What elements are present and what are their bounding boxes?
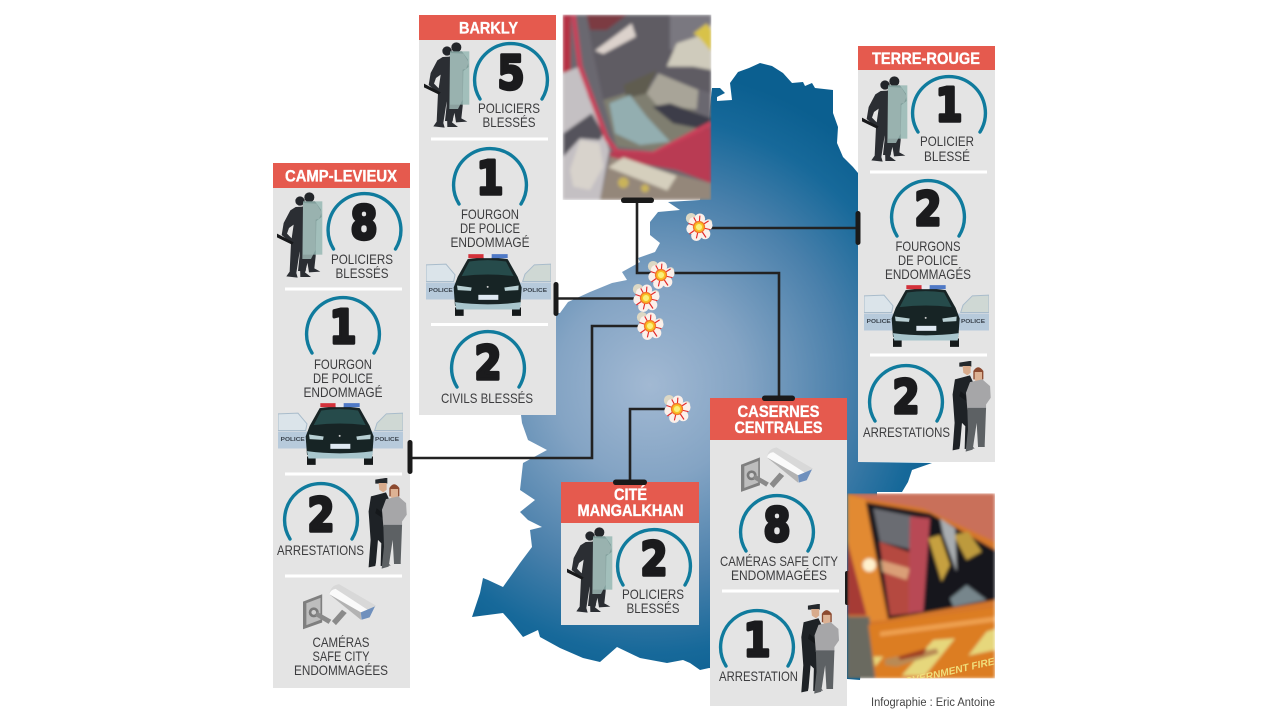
stat: 2 civils blessés: 2 — [474, 336, 502, 390]
stat: 5 policiers blessés: BLESSÉS — [482, 114, 536, 130]
panel: Cité Mangalkhan — [561, 482, 699, 625]
text: caméras safe city: ENDOMMAGÉES — [294, 662, 388, 678]
icon: security camera — [741, 447, 813, 492]
stat: 2 civils blessés: CIVILS BLESSÉS — [441, 390, 533, 406]
stat: 1 arrestation: 1 — [744, 613, 770, 667]
stat: 8 caméras — [720, 496, 839, 583]
text: caméras safe city: SAFE CITY — [312, 648, 370, 664]
heading: Terre-Rouge: TERRE-ROUGE — [872, 49, 980, 68]
icon: police car — [864, 285, 989, 347]
icon: security camera — [303, 584, 376, 629]
stat: 8 policiers blessés: BLESSÉS — [336, 265, 388, 281]
icon: arrest — [953, 361, 991, 452]
explosion marker: Camp-Levieux — [637, 312, 664, 340]
panel: Camp-Levieux — [273, 163, 410, 688]
explosion marker: Barkly — [633, 284, 660, 312]
stat: 2 fourgons: 2 — [914, 182, 942, 236]
stat: 5 policiers blessés — [475, 44, 547, 130]
panel: Barkly — [419, 15, 556, 415]
panel: Terre-Rouge — [858, 46, 995, 462]
stat: 2 arrestations: 2 — [892, 370, 920, 424]
stat: 1 fourgon: ENDOMMAGÉ — [304, 384, 382, 400]
stat: 2 fourgons: FOURGONS — [896, 238, 960, 254]
stat: 2 policiers blessés — [618, 530, 690, 616]
stat: 1 policier blessé: POLICIER — [920, 133, 974, 149]
stat: 2 fourgons — [885, 181, 971, 282]
stat: 1 fourgon — [304, 298, 382, 400]
connector: photo to Casernes Centrales — [621, 198, 795, 401]
stat: 1 fourgon: ENDOMMAGÉ — [450, 234, 530, 250]
text: caméras safe city: CAMÉRAS — [312, 634, 370, 650]
stat: 1 arrestation — [719, 611, 798, 684]
icon: riot police — [567, 527, 612, 613]
stat: 2 arrestations: ARRESTATIONS — [863, 424, 950, 440]
stat: 2 arrestations: 2 — [308, 488, 334, 542]
stat: 2 civils blessés — [441, 332, 533, 406]
stat: 1 fourgon: DE POLICE — [313, 370, 373, 386]
heading: Barkly: BARKLY — [459, 18, 519, 38]
icon: arrest — [369, 478, 407, 569]
panel: Casernes Centrales — [710, 398, 847, 706]
connector: explosion to Terre-Rouge — [705, 211, 860, 245]
connector: explosion to Cité Mangalkhan — [613, 409, 672, 485]
stat: 8 policiers blessés: POLICIERS — [331, 251, 393, 267]
photo: damaged orange fire car — [847, 493, 996, 690]
photo: damaged orange fire car: GOVERNMENT FIRE — [896, 656, 996, 690]
text: caméras safe city — [294, 634, 388, 678]
stat: 1 policier blessé — [913, 77, 985, 164]
stat: 1 fourgon: 1 — [330, 300, 356, 354]
stat: 8 caméras: 8 — [764, 498, 790, 552]
heading: Casernes Centrales: CASERNES — [738, 402, 820, 421]
icon: police car — [426, 254, 551, 316]
stat: 2 fourgons: ENDOMMAGÉS — [885, 266, 971, 282]
stat: 5 policiers blessés: 5 — [498, 46, 524, 100]
stat: 1 fourgon: FOURGON — [314, 356, 372, 372]
stat: 1 fourgon: 1 — [476, 151, 504, 205]
connector: explosion to Barkly — [554, 282, 640, 316]
photo: damaged red car interior — [563, 15, 711, 200]
heading: Casernes Centrales: CENTRALES — [734, 418, 822, 437]
explosion marker: Casernes Centrales — [648, 261, 675, 289]
stat: 1 policier blessé: BLESSÉ — [924, 148, 970, 164]
stat: 1 policier blessé: 1 — [936, 78, 962, 132]
icon: police car — [278, 403, 403, 465]
stat: 2 policiers blessés: BLESSÉS — [626, 600, 680, 616]
icon: riot police — [277, 192, 322, 278]
stat: 1 arrestation: ARRESTATION — [719, 668, 798, 684]
heading: Camp-Levieux: CAMP-LEVIEUX — [285, 166, 398, 186]
stat: 8 caméras: ENDOMMAGÉES — [731, 567, 827, 583]
explosion marker: Cité Mangalkhan — [664, 395, 691, 423]
stat: 2 arrestations — [863, 366, 950, 440]
stat: 2 arrestations — [277, 484, 364, 558]
stat: 2 policiers blessés: 2 — [640, 532, 668, 586]
connector bar: Casernes Centrales to photo — [845, 571, 850, 605]
stat: 8 policiers blessés: 8 — [350, 196, 378, 250]
connector: explosion to Camp-Levieux — [408, 326, 645, 474]
heading: Casernes Centrales — [734, 402, 822, 437]
stat: 5 policiers blessés: POLICIERS — [478, 100, 540, 116]
map of the district — [472, 63, 932, 680]
stat: 2 policiers blessés: POLICIERS — [622, 586, 684, 602]
stat: 1 fourgon — [450, 149, 530, 250]
heading: Cité Mangalkhan: MANGALKHAN — [578, 501, 684, 520]
explosion marker: Terre-Rouge — [686, 213, 713, 241]
credit: Infographie : Eric Antoine — [871, 697, 995, 709]
stat: 1 fourgon: DE POLICE — [460, 220, 520, 236]
stat: 2 fourgons: DE POLICE — [898, 252, 958, 268]
heading: Cité Mangalkhan — [578, 485, 684, 520]
stat: 8 caméras: CAMÉRAS SAFE CITY — [720, 553, 839, 569]
icon: riot police — [424, 42, 469, 128]
icon: riot police — [862, 76, 907, 162]
stat: 2 arrestations: ARRESTATIONS — [277, 542, 364, 558]
icon: arrest — [801, 604, 839, 694]
stat: 1 fourgon: FOURGON — [461, 206, 519, 222]
heading: Cité Mangalkhan: CITÉ — [614, 485, 647, 504]
stat: 8 policiers blessés — [328, 194, 401, 281]
